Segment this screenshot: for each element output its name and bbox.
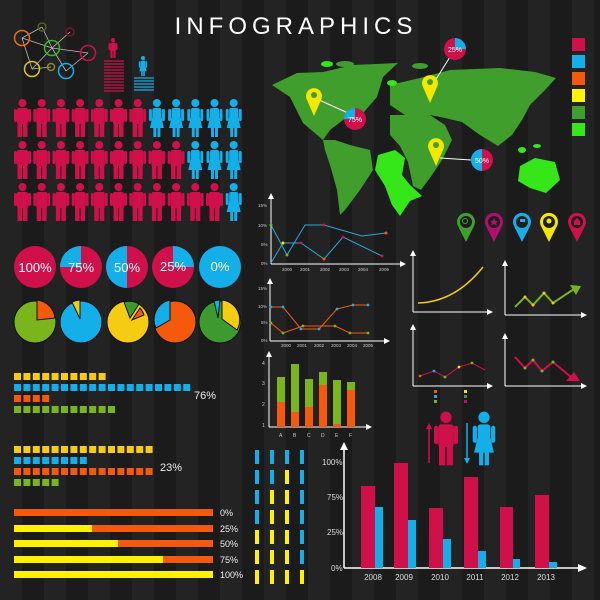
- stacked bar chart: D: [321, 433, 325, 439]
- percentage pies: 50%: [114, 260, 140, 275]
- stacked bar chart: F: [349, 433, 352, 439]
- yearly bar chart: 75%: [327, 493, 343, 502]
- line chart 2: 2001: [297, 343, 308, 348]
- curve chart: [410, 250, 493, 315]
- title: INFOGRAPHICS: [175, 13, 417, 40]
- location icons: [457, 213, 586, 242]
- line chart 2: 2002: [314, 343, 325, 348]
- percentage pies: [14, 246, 241, 288]
- line chart 1: 0%: [261, 261, 268, 266]
- progress bars: 100%: [220, 570, 243, 580]
- stacked bar chart: A: [279, 433, 283, 439]
- rising zigzag chart: [502, 260, 587, 318]
- falling zigzag chart: [502, 333, 587, 389]
- percentage pies: 25%: [160, 259, 186, 274]
- yearly bar chart: [322, 442, 587, 582]
- yearly bar chart: 2009: [395, 573, 413, 582]
- progress bars: 50%: [220, 539, 238, 549]
- yearly bar chart: 100%: [322, 458, 342, 467]
- line chart 2: 2004: [347, 343, 358, 348]
- line chart 1: 2005: [379, 267, 390, 272]
- line chart 1: 2003: [339, 267, 350, 272]
- podium: man and woman: [104, 38, 154, 91]
- yearly bar chart: 0%: [331, 564, 343, 573]
- square bars group 23%: 23%: [160, 462, 182, 474]
- line chart 2: 10%: [258, 304, 267, 309]
- line chart 2: 2000: [281, 343, 292, 348]
- yearly bar chart: 2012: [501, 573, 519, 582]
- percentage pies: 100%: [18, 260, 52, 275]
- yearly bar chart: 2013: [537, 573, 555, 582]
- yearly bar chart: 2011: [466, 573, 484, 582]
- stacked bar chart: B: [293, 433, 297, 439]
- dash columns: [255, 450, 304, 584]
- line chart 1: 10%: [258, 223, 267, 228]
- exploded pies: [14, 300, 241, 343]
- color legend: [572, 38, 585, 136]
- small line chart with legend: [410, 324, 493, 403]
- stacked bar chart: 3: [262, 381, 265, 387]
- people grid: [14, 99, 242, 221]
- yearly bar chart: 2008: [364, 573, 382, 582]
- progress bars: 25%: [220, 524, 238, 534]
- map pins and callout pies: 75%: [348, 117, 362, 124]
- stacked bar chart: [262, 351, 372, 439]
- line chart 1: 5%: [261, 242, 268, 247]
- world map: [272, 61, 560, 216]
- line chart 1: 2000: [282, 267, 293, 272]
- progress bars: 0%: [220, 508, 233, 518]
- progress bars: 75%: [220, 555, 238, 565]
- progress bars: [14, 508, 243, 580]
- line chart 2: 0%: [261, 338, 268, 343]
- yearly bar chart: 25%: [327, 528, 343, 537]
- line chart 1: 2002: [320, 267, 331, 272]
- line chart 1: 2001: [300, 267, 311, 272]
- line chart 2: 2003: [331, 343, 342, 348]
- line chart 1: [258, 193, 406, 272]
- stacked bar chart: C: [307, 433, 311, 439]
- line chart 2: 15%: [258, 286, 267, 291]
- gender icons with arrows: [426, 412, 495, 465]
- square bars group 76%: 76%: [194, 390, 216, 402]
- line chart 1: 15%: [258, 203, 267, 208]
- line chart 1: 2004: [358, 267, 369, 272]
- stacked bar chart: 4: [262, 361, 265, 367]
- map pins and callout pies: [306, 38, 493, 171]
- line chart 2: [258, 278, 390, 348]
- line chart 2: 2005: [363, 343, 374, 348]
- stacked bar chart: 2: [262, 402, 265, 408]
- stacked bar chart: E: [335, 433, 339, 439]
- percentage pies: 75%: [68, 260, 94, 275]
- map pins and callout pies: 50%: [475, 158, 489, 165]
- yearly bar chart: 2010: [431, 573, 449, 582]
- percentage pies: 0%: [211, 259, 230, 274]
- map pins and callout pies: 25%: [448, 47, 462, 54]
- line chart 2: 5%: [261, 320, 268, 325]
- network diagram: [14, 23, 96, 78]
- stacked bar chart: 1: [262, 423, 265, 429]
